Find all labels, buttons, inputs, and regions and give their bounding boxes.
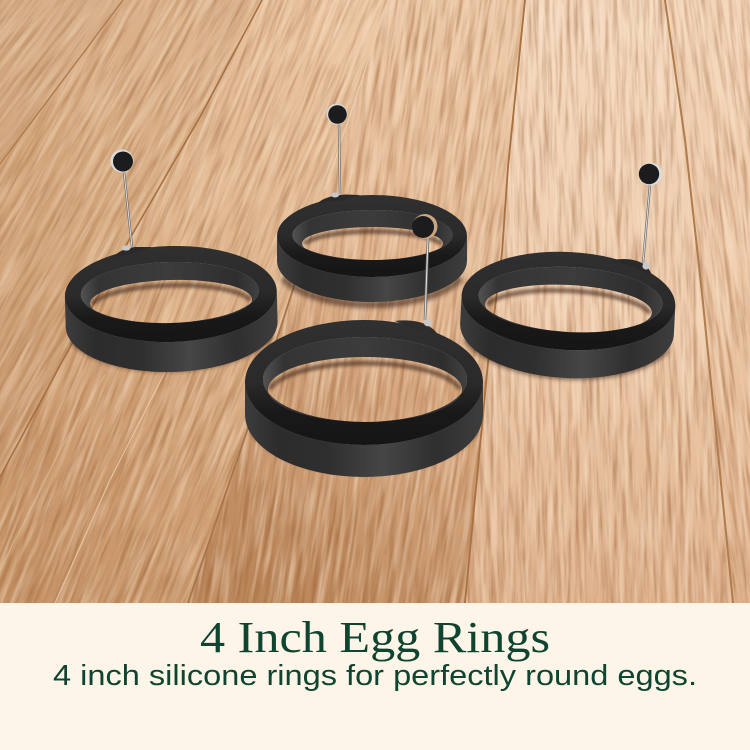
ring: back centre — [277, 104, 467, 305]
caption panel — [0, 603, 750, 750]
ring: right — [458, 162, 678, 384]
subheading: 4 inch silicone rings for perfectly round eggs. — [53, 660, 697, 692]
ring: front centre — [245, 214, 483, 477]
handle: left — [110, 150, 134, 251]
handle: front centre — [412, 214, 438, 326]
ring: left — [64, 150, 279, 375]
handle: back centre — [326, 104, 348, 198]
handle: right — [639, 162, 662, 270]
heading: 4 Inch Egg Rings — [200, 613, 550, 662]
